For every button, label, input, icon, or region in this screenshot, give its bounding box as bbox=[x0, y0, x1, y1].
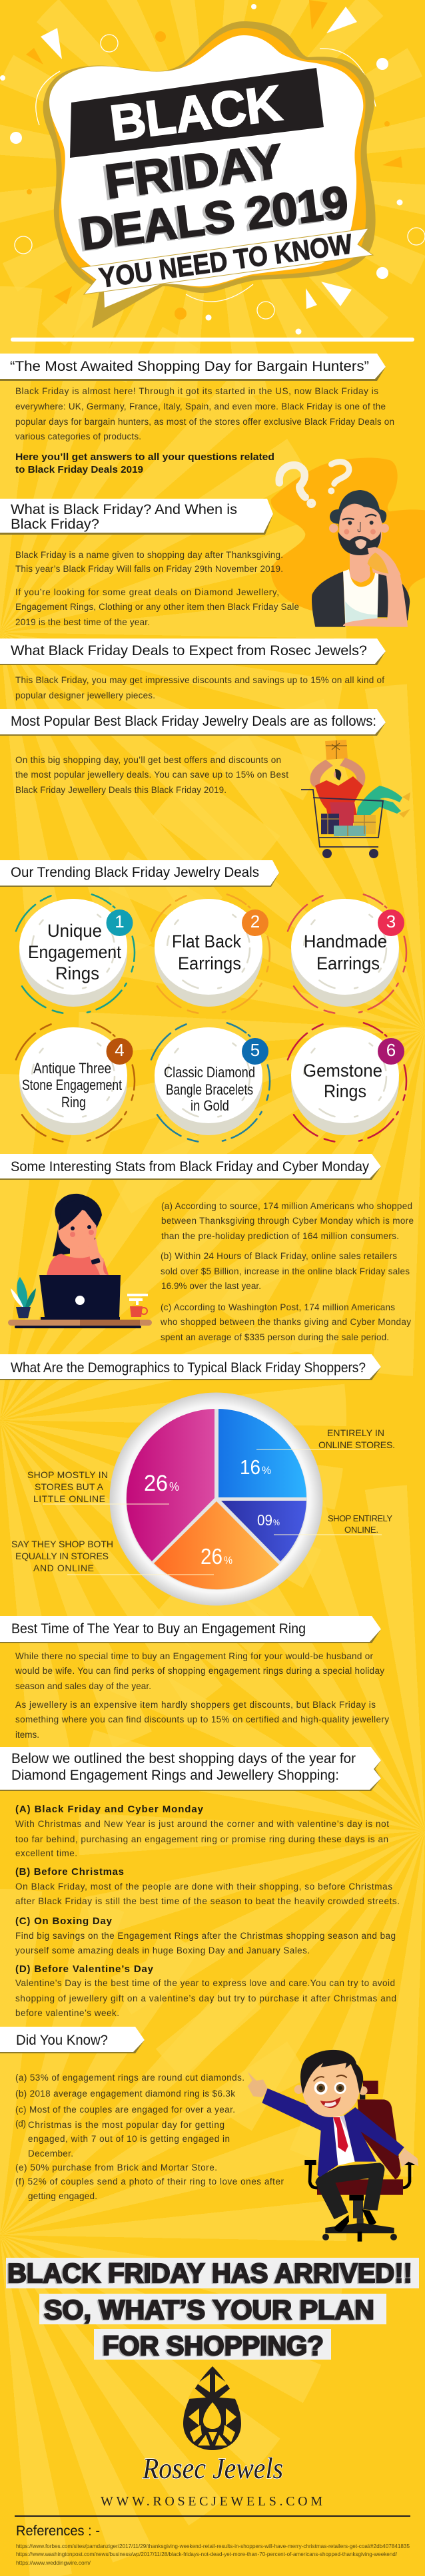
text: deals to expect bbox=[15, 675, 384, 700]
closing headline: so what's your plan: SO, WHAT’S YOUR PLAN bbox=[43, 2295, 373, 2326]
deal circle 1: unique engagement rings: Engagement bbox=[28, 942, 121, 962]
did you know list: engaged, with 7 out of 10 is getting engaged in bbox=[28, 2134, 230, 2144]
deal circle 2: flat back earrings bbox=[133, 878, 284, 1028]
deal circle 2: flat back earrings: 2 bbox=[250, 911, 260, 931]
section D: before valentine's day bbox=[15, 1963, 396, 2018]
section D: before valentine's day: shopping of jewellery gift on a valentine’s day but try to purchase it after Christmas and bbox=[15, 1993, 396, 2003]
logo: teardrop diamond bbox=[183, 2366, 241, 2450]
deal circle 2: flat back earrings: Flat Back bbox=[172, 931, 241, 951]
closing headline: for shopping: FOR SHOPPING? bbox=[103, 2330, 324, 2361]
stats text list: 16.9% over the last year. bbox=[161, 1281, 261, 1291]
section C: on boxing day bbox=[15, 1916, 396, 1955]
stats text list: (a) According to source, 174 million Americans who shopped bbox=[161, 1201, 412, 1211]
closing headline: so what's your plan: SO, WHAT’S YOUR PLAN bbox=[44, 2294, 374, 2325]
deal circle 3: handmade earrings: 3 bbox=[386, 911, 396, 931]
references list: https://www.washingtonpost.com/news/business/wp/2017/11/28/black-fridays-not-dead-yet-more-than-70-percent-of-americans-shopped-thanksgiving-weekend/ bbox=[16, 2551, 398, 2557]
section A: black friday and cyber monday bbox=[15, 1804, 389, 1858]
text: what is black friday answer: 2019 is the best time of the year. bbox=[15, 617, 150, 627]
did you know list: December. bbox=[28, 2149, 73, 2159]
pie label: both equally bbox=[11, 1539, 214, 1575]
value 26% left: 26 bbox=[144, 1471, 168, 1496]
deal circle 5: classic diamond bangle bracelets in gold bbox=[133, 1006, 284, 1157]
pie chart: shopper demographics bbox=[109, 1393, 322, 1606]
slice: both equally 26% bbox=[154, 1501, 279, 1589]
banner: did you know bbox=[0, 2027, 145, 2053]
section A: black friday and cyber monday: (A) Black Friday and Cyber Monday bbox=[15, 1804, 204, 1815]
pie label: both equally: AND ONLINE bbox=[33, 1563, 94, 1573]
banner: trending deals: Our Trending Black Friday Jewelry Deals bbox=[11, 865, 259, 880]
bubble white face bbox=[49, 35, 363, 308]
section D: before valentine's day: before valentine’s week. bbox=[15, 2008, 119, 2018]
deal circle 6: gemstone rings: 6 bbox=[386, 1040, 396, 1060]
pie label: shop entirely online bbox=[274, 1513, 392, 1535]
stats text list bbox=[160, 1201, 414, 1342]
value 09%: 09 bbox=[257, 1511, 272, 1529]
intro bold note: Here you’ll get answers to all your questions related bbox=[15, 451, 274, 463]
did you know list: (f) 52% of couples send a photo of their ring to love ones after bbox=[15, 2177, 284, 2187]
title word BLACK: BLACK bbox=[107, 75, 284, 151]
deal circle 5: classic diamond bangle bracelets in gold: in Gold bbox=[191, 1097, 229, 1114]
banner: best time of the year: Best Time of The Year to Buy an Engagement Ring bbox=[11, 1621, 306, 1637]
section B: before christmas: after Black Friday is still the best time of the season to beat the heavily crowded streets. bbox=[15, 1896, 400, 1906]
stats text list: (c) According to Washington Post, 174 million Americans bbox=[161, 1302, 395, 1312]
pie label: shop mostly in stores bbox=[27, 1469, 169, 1504]
banner: deals to expect bbox=[0, 639, 386, 665]
banner: interesting stats bbox=[0, 1154, 381, 1180]
closing headline: black friday has arrived: BLACK FRIDAY HAS ARRIVED!! bbox=[6, 2258, 411, 2289]
intro paragraph bbox=[15, 386, 394, 441]
deal circle 4: antique three stone engagement ring bbox=[0, 1006, 149, 1157]
deal circle 3: handmade earrings bbox=[270, 878, 420, 1028]
text: most popular: the most popular jewellery deals. You can save up to 15% on Best bbox=[15, 770, 288, 780]
deal circle 5: classic diamond bangle bracelets in gold: 5 bbox=[250, 1040, 260, 1060]
closing headline: for shopping: FOR SHOPPING? bbox=[101, 2331, 322, 2362]
section C: on boxing day: Find big savings on the Engagement Rings after the Christmas shopping season and bag bbox=[15, 1931, 396, 1941]
illustration: businessman pointing on office chair bbox=[248, 2050, 418, 2242]
section C: on boxing day: (C) On Boxing Day bbox=[15, 1916, 113, 1927]
text: what is black friday answer: If you’re looking for some great deals on Diamond Jewellery, bbox=[15, 587, 279, 597]
stats text list: between Thanksgiving through Cyber Monday which is more bbox=[161, 1216, 414, 1226]
banner: best time of the year bbox=[0, 1616, 381, 1643]
section A: black friday and cyber monday: too far behind, purchasing an engagement ring or promise ring during these days is an bbox=[15, 1834, 388, 1844]
intro paragraph: everywhere: UK, Germany, France, Italy, Spain, and even more. Black Friday is one of the bbox=[15, 401, 386, 411]
hero divider line bbox=[11, 338, 414, 342]
banner: what is black friday: Black Friday? bbox=[11, 517, 99, 532]
value 26% bottom: 26 bbox=[201, 1544, 222, 1569]
value 09%: % bbox=[273, 1517, 280, 1527]
section B: before christmas: (B) Before Christmas bbox=[15, 1866, 124, 1878]
banner: most popular bbox=[0, 709, 386, 736]
banner: what is black friday bbox=[0, 499, 273, 535]
did you know list: (b) 2018 average engagement diamond ring is $6.3k bbox=[15, 2089, 235, 2099]
banner: interesting stats: Some Interesting Stats from Black Friday and Cyber Monday bbox=[11, 1159, 369, 1174]
pie label: shop entirely online: ONLINE. bbox=[344, 1525, 378, 1535]
pie label: entirely in online stores: ENTIRELY IN bbox=[327, 1427, 384, 1438]
title words DEALS 2019: DEALS 2019 bbox=[78, 176, 351, 260]
intro bold note bbox=[15, 451, 274, 475]
section B: before christmas: On Black Friday, most of the people are done with their shopping, so before Christmas bbox=[15, 1882, 392, 1892]
value 16%: 16 bbox=[240, 1455, 260, 1479]
text: what is black friday answer: Black Friday is a name given to shopping day after Thanksgiving. bbox=[15, 550, 283, 560]
stats text list: who shopped between the thanks giving and Cyber Monday bbox=[160, 1317, 411, 1327]
pie label: entirely in online stores: ONLINE STORES. bbox=[318, 1439, 395, 1450]
banner: demographics bbox=[0, 1354, 381, 1380]
text: what is black friday answer bbox=[15, 550, 299, 627]
deal circle 4: antique three stone engagement ring: 4 bbox=[115, 1040, 125, 1060]
text: deals to expect: popular designer jewellery pieces. bbox=[15, 690, 155, 700]
deal circle 1: unique engagement rings: Rings bbox=[55, 963, 99, 983]
stats text list: than the pre-holiday prediction of 164 million consumers. bbox=[161, 1231, 399, 1241]
did you know list: (c) Most of the couples are engaged for over a year. bbox=[15, 2105, 235, 2115]
did you know list bbox=[15, 2073, 284, 2201]
illustration: man in shopping cart bbox=[301, 740, 410, 858]
stats text list: (b) Within 24 Hours of Black Friday, online sales retailers bbox=[161, 1251, 397, 1261]
text: most popular: On this big shopping day, you’ll get best offers and discounts on bbox=[15, 755, 281, 765]
pie label: both equally: EQUALLY IN STORES bbox=[15, 1551, 109, 1561]
pie label: both equally: SAY THEY SHOP BOTH bbox=[11, 1539, 113, 1549]
did you know list: (a) 53% of engagement rings are round cut diamonds. bbox=[15, 2073, 244, 2083]
stats text list: spent an average of $335 person during the sale period. bbox=[161, 1332, 389, 1342]
section B: before christmas bbox=[15, 1866, 400, 1906]
text: deals to expect: This Black Friday, you may get impressive discounts and savings up to 15% on all kind of bbox=[15, 675, 384, 685]
deal circle 1: unique engagement rings: 1 bbox=[115, 911, 125, 931]
text: most popular: Black Friday Jewellery Deals this Black Friday 2019. bbox=[15, 785, 226, 795]
deal circle 4: antique three stone engagement ring: Stone Engagement bbox=[22, 1077, 122, 1093]
text: what is black friday answer: Engagement Rings, Clothing or any other item then Black Friday Sale bbox=[15, 602, 299, 612]
section D: before valentine's day: (D) Before Valentine’s Day bbox=[15, 1963, 154, 1975]
slice: mostly in stores 26% bbox=[127, 1409, 214, 1561]
banner: most awaited: “The Most Awaited Shopping Day for Bargain Hunters” bbox=[10, 359, 369, 374]
text: best time: While there no special time to buy an Engagement Ring for your would-be husband or bbox=[15, 1651, 373, 1661]
logo wordmark: Rosec Jewels bbox=[142, 2452, 283, 2485]
pie label: shop mostly in stores: STORES BUT A bbox=[35, 1481, 104, 1492]
pie label: shop entirely online: SHOP ENTIRELY bbox=[328, 1513, 392, 1523]
intro paragraph: various categories of products. bbox=[15, 431, 141, 441]
references list bbox=[16, 2543, 410, 2566]
stats text list: sold over $5 Billion, increase in the online black Friday sales bbox=[161, 1266, 410, 1276]
bubble outer olive outline bbox=[43, 21, 376, 328]
intro paragraph: popular days for bargain hunters, as most of the stores offer exclusive Black Friday Deals on bbox=[15, 417, 394, 427]
section A: black friday and cyber monday: excellent time. bbox=[15, 1848, 77, 1858]
closing headline: black friday has arrived: BLACK FRIDAY HAS ARRIVED!! bbox=[7, 2258, 412, 2288]
text: best time: season and sales day of the year. bbox=[15, 1681, 151, 1691]
did you know list: Christmas is the most popular day for getting bbox=[28, 2120, 224, 2130]
did you know list: (d) bbox=[15, 2119, 26, 2129]
deal circle 6: gemstone rings bbox=[270, 1006, 420, 1157]
value 26% left: % bbox=[169, 1480, 179, 1493]
deal circle 3: handmade earrings: Earrings bbox=[316, 953, 380, 973]
illustration: woman with laptop at desk bbox=[8, 1194, 152, 1328]
value 26% bottom: % bbox=[224, 1554, 232, 1567]
text: best time: items. bbox=[15, 1730, 39, 1740]
deal circle 1: unique engagement rings: Unique bbox=[47, 921, 102, 941]
text: best time: would be wife. You can find perks of shopping engagement rings during a special holiday bbox=[15, 1666, 384, 1676]
banner: most popular: Most Popular Best Black Friday Jewelry Deals are as follows: bbox=[11, 714, 376, 729]
website address: WWW.ROSECJEWELS.COM bbox=[101, 2494, 322, 2509]
deal circle 5: classic diamond bangle bracelets in gold: Bangle Bracelets bbox=[166, 1081, 253, 1098]
banner: best shopping days: Below we outlined the best shopping days of the year for bbox=[11, 1751, 356, 1766]
did you know list: getting engaged. bbox=[28, 2191, 97, 2201]
pie label: entirely in online stores bbox=[256, 1427, 395, 1450]
value 16%: % bbox=[262, 1464, 271, 1477]
references list: https://www.forbes.com/sites/pamdanziger/2017/11/29/thanksgiving-weekend-retail-results-in-shoppers-will-have-merry-christmas-retailers-get-coal/#2db407841835 bbox=[16, 2543, 410, 2549]
section D: before valentine's day: Valentine’s Day is the best time of the year to express love and care.You can try to avoid bbox=[15, 1978, 395, 1988]
text: what is black friday answer: This year’s Black Friday Will falls on Friday 29th November 2019. bbox=[15, 564, 283, 574]
illustration: thinking man with question marks bbox=[271, 457, 425, 627]
banner: trending deals bbox=[0, 860, 279, 887]
banner: demographics: What Are the Demographics to Typical Black Friday Shoppers? bbox=[11, 1360, 366, 1376]
text: best time bbox=[15, 1651, 389, 1740]
pie label: shop mostly in stores: SHOP MOSTLY IN bbox=[27, 1469, 108, 1480]
references heading: References : - bbox=[16, 2523, 100, 2539]
banner: best shopping days: Diamond Engagement Rings and Jewellery Shopping: bbox=[11, 1768, 339, 1783]
hero confetti decorations bbox=[0, 0, 425, 334]
pie label: shop mostly in stores: LITTLE ONLINE bbox=[33, 1493, 105, 1504]
text: best time: something where you can find discounts up to 15% on certified and high-quality jewellery bbox=[15, 1714, 389, 1724]
section C: on boxing day: yourself some amazing deals in huge Boxing Day and January Sales. bbox=[15, 1945, 310, 1955]
deal circle 4: antique three stone engagement ring: Antique Three bbox=[33, 1060, 111, 1077]
ribbon bbox=[80, 228, 373, 294]
title word FRIDAY: FRIDAY bbox=[102, 134, 286, 209]
banner: most awaited bbox=[0, 354, 386, 381]
bubble orange layer bbox=[51, 28, 366, 288]
text: most popular bbox=[15, 755, 288, 795]
deal circle 3: handmade earrings: Handmade bbox=[304, 931, 387, 951]
banner: what is black friday: What is Black Friday? And When is bbox=[11, 502, 237, 517]
ribbon text: YOU NEED TO KNOW bbox=[97, 228, 354, 294]
hero: speech bubble title bbox=[0, 0, 425, 342]
title words DEALS 2019: DEALS 2019 bbox=[75, 178, 348, 261]
section A: black friday and cyber monday: With Christmas and New Year is just around the corner and with valentine’s day is not bbox=[15, 1819, 389, 1829]
banner: did you know: Did You Know? bbox=[16, 2033, 108, 2048]
did you know list: (e) 50% purchase from Brick and Mortar Store. bbox=[15, 2163, 217, 2173]
deal circle 1: unique engagement rings bbox=[0, 878, 149, 1028]
black title banner bbox=[70, 68, 324, 158]
references list: https://www.weddingwire.com/ bbox=[16, 2559, 91, 2566]
intro bold note: to Black Friday Deals 2019 bbox=[15, 464, 143, 475]
banner: deals to expect: What Black Friday Deals to Expect from Rosec Jewels? bbox=[11, 643, 367, 658]
deal circle 5: classic diamond bangle bracelets in gold: Classic Diamond bbox=[164, 1064, 255, 1081]
intro paragraph: Black Friday is almost here! Through it got its started in the US, now Black Friday is bbox=[15, 386, 378, 396]
banner: best shopping days bbox=[0, 1747, 381, 1791]
text: best time: As jewellery is an expensive item hardly shoppers get discounts, but Black Friday is bbox=[15, 1700, 376, 1710]
deal circle 2: flat back earrings: Earrings bbox=[178, 953, 241, 973]
slice: shop entirely online 09% bbox=[221, 1501, 306, 1561]
deal circle 4: antique three stone engagement ring: Ring bbox=[61, 1094, 86, 1111]
deal circle 6: gemstone rings: Rings bbox=[324, 1081, 366, 1101]
slice: entirely in online stores 16% bbox=[218, 1409, 306, 1497]
title word FRIDAY: FRIDAY bbox=[99, 136, 283, 210]
deal circle 6: gemstone rings: Gemstone bbox=[303, 1061, 382, 1081]
